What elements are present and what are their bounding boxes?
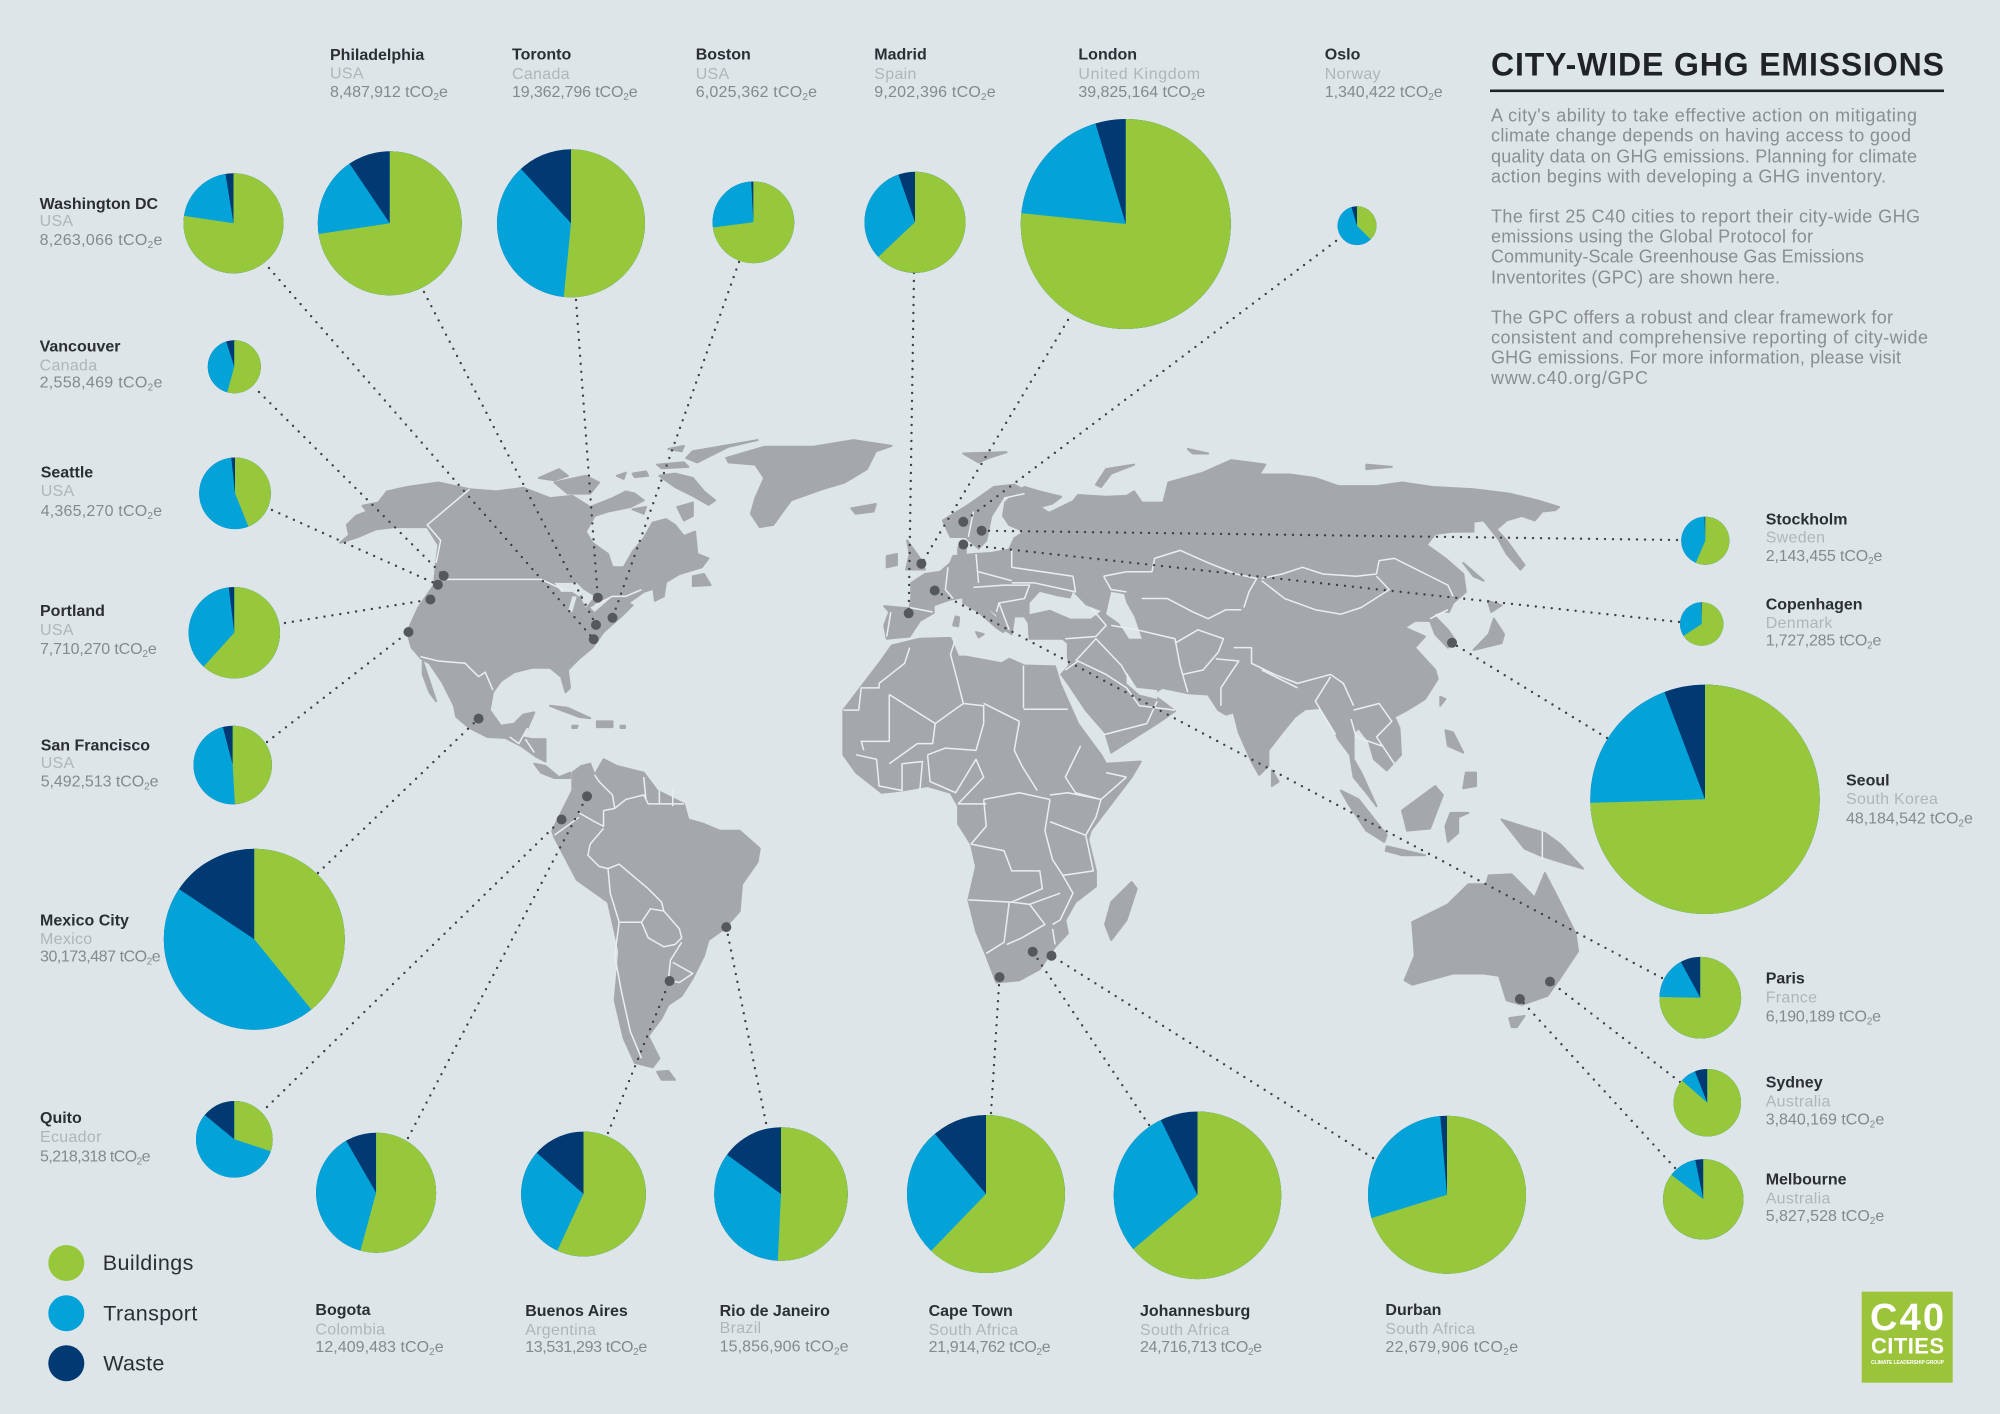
world map [340, 440, 1583, 1080]
pie: Vancouver [208, 340, 261, 393]
label: Bogota [315, 1302, 444, 1358]
pie: Mexico City [164, 849, 345, 1030]
label: Philadelphia: e [439, 84, 448, 101]
label: Mexico City: Mexico [40, 931, 92, 948]
label: Mexico City: 2 [147, 957, 153, 968]
label: Buenos Aires: e [638, 1339, 647, 1356]
intro text block: climate change depends on having access to good [1491, 126, 1911, 146]
pie: Bogota [316, 1133, 436, 1253]
label: Johannesburg: 2 [1248, 1347, 1254, 1358]
city location markers [404, 517, 1555, 1004]
pie: Seattle [199, 458, 271, 529]
intro text block: Inventorites (GPC) are shown here. [1491, 267, 1780, 287]
label: Bogota: Bogota [315, 1302, 371, 1319]
label: Cape Town: e [1042, 1339, 1051, 1356]
legend: Transport [103, 1302, 197, 1326]
label: Stockholm: Sweden [1766, 530, 1825, 547]
label: Paris: 2 [1867, 1017, 1873, 1028]
label: San Francisco [41, 738, 159, 793]
label: Stockholm: e [1874, 548, 1883, 565]
label: Quito: e [142, 1149, 151, 1166]
label: Quito: Quito [40, 1110, 82, 1127]
label: Toronto: Canada [512, 66, 570, 83]
label: Portland: USA [40, 622, 74, 639]
label: Copenhagen [1766, 596, 1882, 652]
label: Mexico City: e [152, 949, 161, 966]
label: Quito: 2 [137, 1157, 143, 1168]
label: Seoul: 48,184,542 tCO [1846, 810, 1958, 827]
label: Melbourne [1766, 1171, 1884, 1227]
label: Bogota: 12,409,483 tCO [315, 1339, 429, 1356]
label: Washington DC: 2 [148, 240, 154, 251]
label: Copenhagen: Denmark [1766, 615, 1833, 632]
label: Cape Town: Cape Town [929, 1303, 1013, 1320]
label: Philadelphia: 8,487,912 tCO [330, 84, 433, 101]
label: London: 39,825,164 tCO [1078, 84, 1191, 101]
label: Bogota: 2 [429, 1347, 435, 1358]
label: Rio de Janeiro: 2 [834, 1347, 840, 1358]
label: Durban: South Africa [1385, 1321, 1475, 1338]
label: Buenos Aires [525, 1303, 647, 1358]
label: Stockholm: Stockholm [1766, 511, 1847, 528]
label: Seattle: 2 [147, 511, 153, 522]
label: London: 2 [1191, 92, 1197, 103]
label: London: United Kingdom [1078, 66, 1201, 83]
label: Copenhagen: Copenhagen [1766, 596, 1863, 613]
label: Rio de Janeiro: Rio de Janeiro [720, 1303, 830, 1320]
intro text block: A city's ability to take effective action on mitigating [1491, 106, 1917, 126]
label: Philadelphia [330, 47, 448, 103]
label: Washington DC: 8,263,066 tCO [40, 232, 148, 249]
label: Seoul: South Korea [1846, 791, 1938, 808]
pie: Philadelphia [318, 151, 462, 295]
pie: Quito [196, 1101, 273, 1178]
label: Sydney [1766, 1075, 1884, 1130]
label: Johannesburg: 24,716,713 tCO [1140, 1339, 1248, 1356]
pie: Washington DC [184, 173, 284, 273]
label: Oslo: Oslo [1325, 46, 1361, 63]
legend: Buildings [103, 1251, 193, 1275]
label: Oslo: e [1434, 84, 1443, 101]
label: Melbourne: 5,827,528 tCO [1766, 1208, 1870, 1225]
intro text block: quality data on GHG emissions. Planning for climate [1491, 146, 1917, 166]
label: Portland [40, 603, 157, 660]
label: Rio de Janeiro [720, 1303, 849, 1358]
label: Vancouver [40, 339, 163, 394]
label: Rio de Janeiro: Brazil [720, 1320, 761, 1337]
label: Johannesburg: Johannesburg [1140, 1303, 1250, 1320]
label: London: e [1196, 84, 1205, 101]
label: Durban: 2 [1503, 1347, 1509, 1358]
label: Oslo: Norway [1325, 66, 1381, 83]
logo: C40 Cities: CITIES [1871, 1333, 1944, 1358]
label: Durban: Durban [1385, 1302, 1441, 1319]
label: Portland: 2 [142, 649, 148, 660]
label: Seoul: 2 [1958, 818, 1964, 829]
label: Paris [1766, 970, 1881, 1028]
label: Washington DC: Washington DC [40, 196, 159, 213]
label: Boston: USA [696, 66, 730, 83]
intro text block: consistent and comprehensive reporting of city-wide [1491, 327, 1928, 347]
label: Vancouver: 2,558,469 tCO [40, 375, 148, 392]
label: Quito [40, 1110, 151, 1168]
label: Cape Town: 21,914,762 tCO [929, 1339, 1037, 1356]
label: Philadelphia: Philadelphia [330, 47, 424, 64]
label: Philadelphia: 2 [433, 92, 439, 103]
logo: C40 Cities [1862, 1292, 1953, 1383]
label: Sydney: Sydney [1766, 1075, 1823, 1092]
label: Buenos Aires: Buenos Aires [525, 1303, 628, 1320]
label: Quito: 5,218,318 tCO [40, 1149, 137, 1166]
label: Bogota: Colombia [315, 1321, 385, 1338]
label: Madrid: e [987, 84, 996, 101]
label: Cape Town: 2 [1037, 1347, 1043, 1358]
label: Vancouver: Canada [40, 358, 97, 375]
label: Copenhagen: 1,727,285 tCO [1766, 633, 1867, 650]
label: Portland: Portland [40, 603, 105, 620]
label: Oslo [1325, 46, 1443, 103]
label: Toronto: e [629, 84, 638, 101]
label: Melbourne: Melbourne [1766, 1171, 1847, 1188]
label: San Francisco: 2 [144, 782, 150, 793]
label: Durban [1385, 1302, 1518, 1358]
label: Madrid: Madrid [874, 46, 927, 63]
label: Madrid: 2 [981, 92, 987, 103]
label: Copenhagen: e [1873, 633, 1882, 650]
label: Seoul [1846, 772, 1973, 829]
label: Seattle: Seattle [41, 464, 93, 481]
label: Madrid [874, 46, 996, 103]
label: Toronto [512, 46, 638, 103]
label: Vancouver: Vancouver [40, 339, 121, 356]
label: Madrid: Spain [874, 66, 917, 83]
label: Boston: Boston [696, 46, 751, 63]
label: Durban: 22,679,906 tCO [1385, 1339, 1503, 1356]
label: Sydney: Australia [1766, 1094, 1831, 1111]
pie: Copenhagen [1680, 602, 1723, 646]
label: Vancouver: 2 [148, 383, 154, 394]
label: Melbourne: e [1875, 1208, 1884, 1225]
pie: Paris [1660, 957, 1741, 1038]
label: Stockholm [1766, 511, 1883, 567]
pie: Madrid [864, 172, 966, 273]
label: Melbourne: 2 [1870, 1216, 1876, 1227]
label: San Francisco: e [150, 774, 159, 791]
pie: Cape Town [907, 1115, 1065, 1273]
intro text block: GHG emissions. For more information, please visit [1491, 347, 1901, 367]
intro text block: www.c40.org/GPC [1490, 368, 1648, 388]
intro text block: The first 25 C40 cities to report their city-wide GHG [1491, 206, 1920, 226]
label: Paris: Paris [1766, 970, 1805, 987]
label: Buenos Aires: Argentina [525, 1322, 596, 1339]
pie: Stockholm [1681, 517, 1729, 565]
label: Oslo: 2 [1428, 92, 1434, 103]
label: Buenos Aires: 2 [633, 1347, 639, 1358]
label: Rio de Janeiro: 15,856,906 tCO [720, 1339, 834, 1356]
label: London: London [1078, 46, 1137, 63]
label: Portland: e [148, 641, 157, 658]
intro text block: Community-Scale Greenhouse Gas Emissions [1491, 247, 1864, 267]
pie: Portland [189, 587, 280, 678]
label: Stockholm: 2,143,455 tCO [1766, 548, 1868, 565]
label: Boston: 6,025,362 tCO [696, 84, 802, 101]
logo: C40 Cities: CLIMATE LEADERSHIP GROUP [1871, 1360, 1945, 1366]
label: Toronto: 2 [623, 92, 629, 103]
pie: Buenos Aires [521, 1132, 646, 1256]
label: Quito: Ecuador [40, 1129, 102, 1146]
label: Copenhagen: 2 [1867, 641, 1873, 652]
label: Vancouver: e [153, 375, 163, 392]
label: Melbourne: Australia [1766, 1190, 1831, 1207]
map: Americas, Greenland and Iceland [340, 440, 891, 1080]
label: Washington DC: USA [40, 213, 73, 230]
label: Seattle: e [153, 503, 162, 520]
label: Sydney: 2 [1870, 1119, 1876, 1130]
label: Cape Town [929, 1303, 1051, 1358]
label: Seoul: Seoul [1846, 772, 1890, 789]
label: Philadelphia: USA [330, 66, 364, 83]
label: Rio de Janeiro: e [840, 1339, 849, 1356]
label: Seoul: e [1964, 810, 1973, 827]
intro text block: action begins with developing a GHG inventory. [1491, 166, 1886, 186]
label: Johannesburg: e [1253, 1339, 1262, 1356]
label: Johannesburg [1140, 1303, 1262, 1358]
intro text block: The GPC offers a robust and clear framework for [1491, 307, 1893, 327]
pie: San Francisco [194, 726, 272, 804]
title: CITY-WIDE GHG EMISSIONS [1491, 47, 1944, 83]
label: Buenos Aires: 13,531,293 tCO [525, 1339, 633, 1356]
label: Sydney: e [1875, 1111, 1884, 1128]
label: Paris: e [1872, 1009, 1881, 1026]
label: Washington DC: e [153, 232, 163, 249]
pie: Seoul [1590, 685, 1820, 914]
label: London [1078, 46, 1205, 103]
label: Boston: e [808, 84, 817, 101]
logo: C40 Cities: C40 [1870, 1297, 1944, 1339]
label: Johannesburg: South Africa [1140, 1322, 1230, 1339]
pie: Johannesburg [1114, 1112, 1281, 1279]
label: Toronto: Toronto [512, 46, 571, 63]
pie: Sydney [1674, 1069, 1741, 1136]
label: Toronto: 19,362,796 tCO [512, 84, 623, 101]
pie: Toronto [497, 149, 645, 297]
legend [48, 1245, 197, 1381]
pie: Boston [713, 182, 794, 263]
label: San Francisco: San Francisco [41, 738, 150, 755]
pie: Rio de Janeiro [714, 1127, 848, 1261]
label: Boston: 2 [802, 92, 808, 103]
dotted leader lines [259, 241, 1680, 1168]
label: Seattle [41, 464, 162, 522]
pie: Durban [1368, 1116, 1526, 1274]
label: Seattle: 4,365,270 tCO [41, 503, 147, 520]
label: Stockholm: 2 [1868, 556, 1874, 567]
label: Portland: 7,710,270 tCO [40, 641, 142, 658]
label: San Francisco: USA [41, 755, 75, 772]
label: Seattle: USA [41, 483, 75, 500]
map: Europe, Asia, Africa and Oceania [843, 449, 1583, 1027]
label: Sydney: 3,840,169 tCO [1766, 1111, 1870, 1128]
label: Mexico City: 30,173,487 tCO [40, 949, 147, 966]
pie: London [1021, 119, 1231, 329]
label: San Francisco: 5,492,513 tCO [41, 774, 144, 791]
label: Oslo: 1,340,422 tCO [1325, 84, 1428, 101]
legend: Waste [103, 1352, 164, 1376]
pie: Oslo [1338, 206, 1376, 245]
label: Cape Town: South Africa [929, 1322, 1018, 1339]
label: Paris: France [1766, 990, 1817, 1007]
label: Madrid: 9,202,396 tCO [874, 84, 981, 101]
label: Bogota: e [435, 1339, 444, 1356]
label: Durban: e [1509, 1339, 1518, 1356]
pie: Melbourne [1663, 1159, 1744, 1240]
label: Mexico City: Mexico City [40, 913, 129, 930]
intro text block [1490, 106, 1928, 388]
label: Boston [696, 46, 817, 103]
intro text block: emissions using the Global Protocol for [1491, 226, 1813, 246]
label: Paris: 6,190,189 tCO [1766, 1009, 1867, 1026]
label: Washington DC [40, 196, 163, 251]
label: Mexico City [40, 913, 161, 968]
